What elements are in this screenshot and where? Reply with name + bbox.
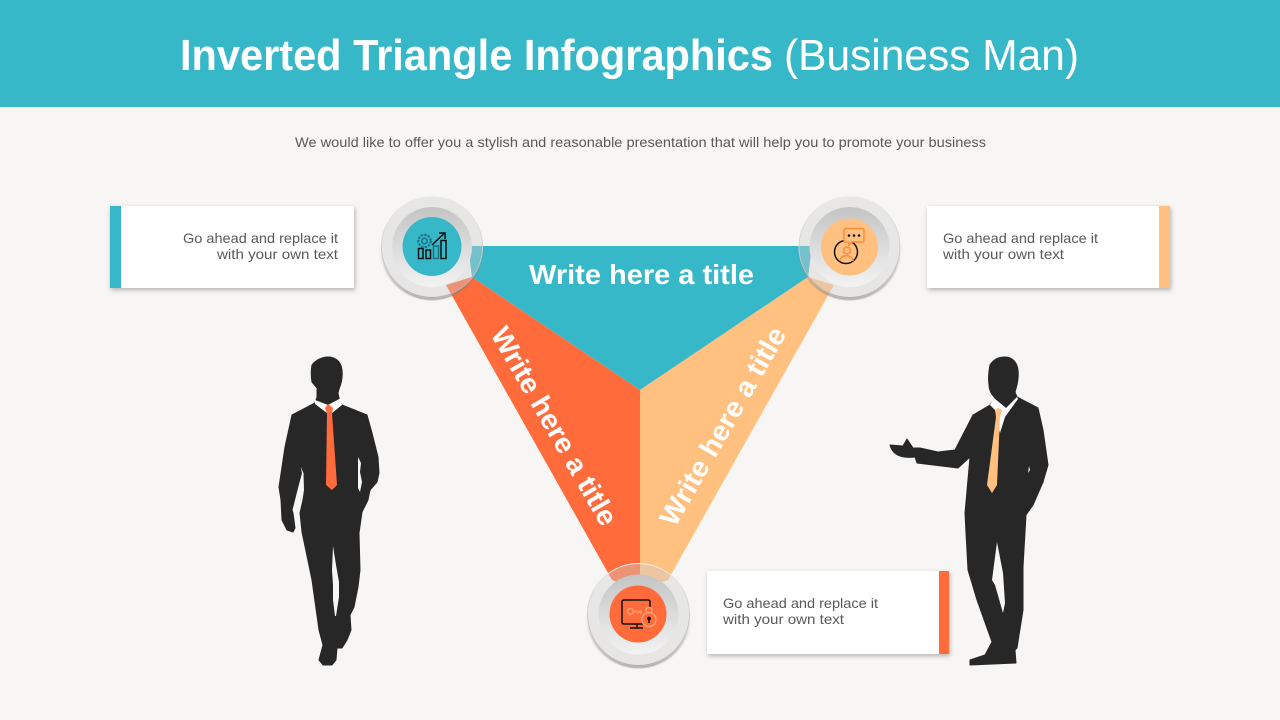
peach tie [987,408,1002,493]
icon: person with speech bubble [834,228,864,264]
triangle title: left: Write here a title [485,322,624,531]
circle badge: bottom [587,564,690,667]
text card: top right: Go ahead and replace it [943,230,1098,246]
silhouette: presenting businessman [890,357,1048,665]
segment: blue top [468,246,812,390]
inner leg gap [332,546,339,616]
triangle title: right: Write here a title [653,322,792,531]
text card: top left [110,206,354,288]
title suffix: (Business Man) [784,31,1079,80]
collar [990,397,1018,433]
silhouette: walking businessman [279,357,379,665]
text card: bottom: with your own text [722,611,844,627]
collar [315,398,342,413]
arm gap [358,457,362,492]
subtitle: We would like to offer you a stylish and reasonable presentation that will help you to promote your business [295,134,986,150]
text card: top right: with your own text [942,246,1064,262]
icon: chart with gear [418,233,446,258]
segment: peach right [640,277,834,590]
segment: orange left [446,277,640,590]
circle badge: top left [381,196,483,299]
orange tie [325,404,337,490]
circle badge: top right [798,196,900,299]
header band [0,0,1280,107]
icon: monitor with key and padlock [622,600,656,628]
title: Inverted Triangle Infographics [180,31,773,80]
text card: top left: with your own text [216,246,338,262]
text card: top right [927,206,1170,288]
inner leg gap [992,542,1005,613]
text card: bottom: Go ahead and replace it [723,595,878,611]
text card: top left: Go ahead and replace it [183,230,338,246]
triangle title: top: Write here a title [529,259,754,290]
text card: bottom [707,571,949,654]
inverted triangle [446,246,834,590]
pocket highlight [1028,466,1030,473]
